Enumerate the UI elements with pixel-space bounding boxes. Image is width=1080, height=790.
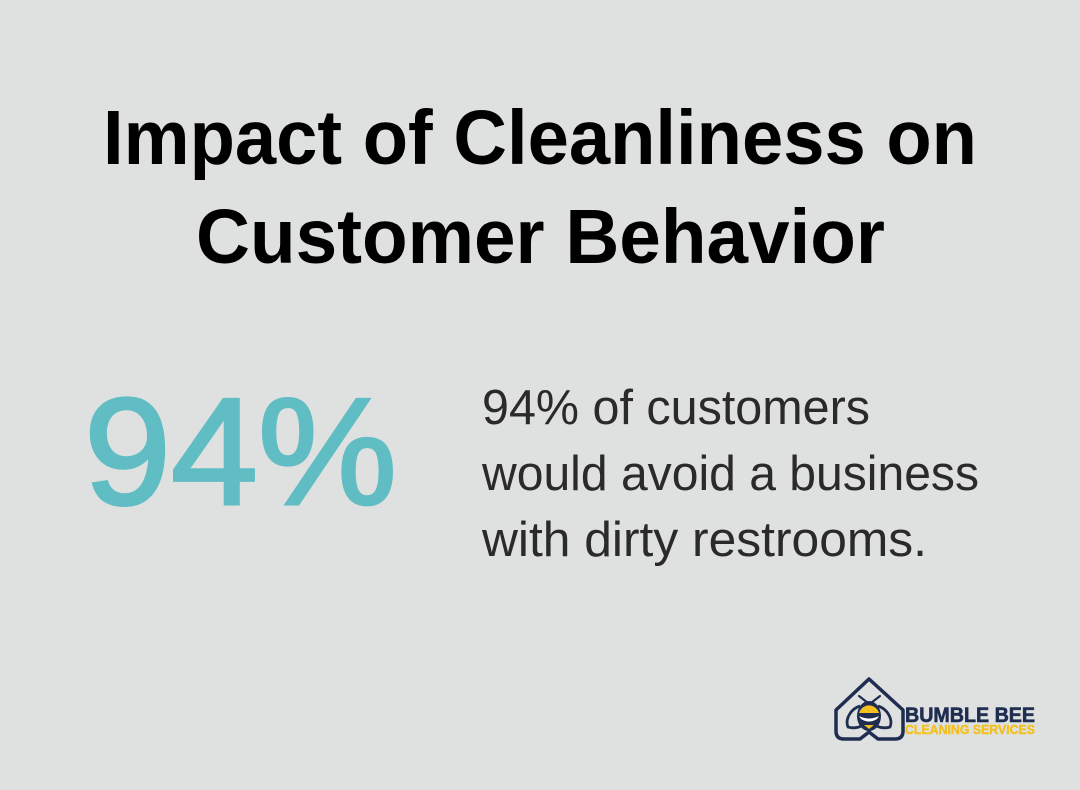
description text: would avoid a business <box>481 447 979 501</box>
logo: Bumble Bee Cleaning Services <box>836 679 1035 739</box>
icon: house outline with bee <box>836 679 903 739</box>
description text: 94% of customers <box>482 381 870 435</box>
description text <box>481 381 979 567</box>
title: Impact of Cleanliness on <box>103 95 977 181</box>
logo tagline: CLEANING SERVICES <box>905 723 1035 737</box>
big statistic: 94%: 94% <box>84 367 397 537</box>
title: Customer Behavior <box>196 194 885 280</box>
title <box>103 95 977 280</box>
description text: with dirty restrooms. <box>481 513 927 567</box>
logo wordmark: BUMBLE BEE <box>905 704 1035 727</box>
